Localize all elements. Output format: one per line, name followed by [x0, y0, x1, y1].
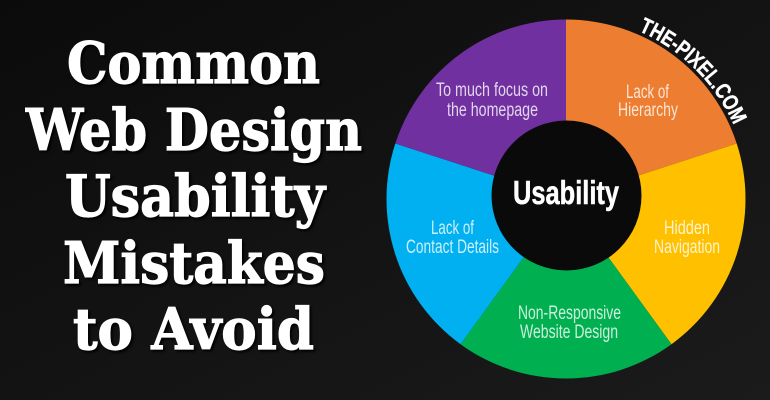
segment: To much focus on the homepage: the homepage: [447, 100, 538, 121]
title: Mistakes: [63, 230, 325, 297]
title: Web Design: [25, 97, 362, 164]
segment: Lack of Contact Details: Contact Details: [406, 237, 499, 258]
segment: Hidden Navigation: Hidden: [664, 218, 710, 239]
segment: To much focus on the homepage: To much focus on: [436, 80, 548, 101]
segment: Lack of Hierarchy: Lack of: [626, 82, 670, 103]
donut chart: usability mistakes: [387, 20, 745, 378]
segment: Lack of Contact Details: [387, 144, 566, 344]
segment: To much focus on the homepage: [395, 20, 566, 199]
center hub: Usability: [492, 120, 642, 270]
title: Common: [67, 30, 320, 97]
segment: Hidden Navigation: Navigation: [654, 237, 720, 258]
segment: Non-Responsive Website Design: Non-Responsive: [518, 303, 621, 324]
title: Usability: [65, 163, 327, 230]
title: [25, 30, 362, 363]
title: to Avoid: [73, 296, 314, 363]
watermark: THE-PIXEL.COM: THE-PIXEL.COM: [642, 17, 748, 124]
segment: Non-Responsive Website Design: [460, 199, 672, 378]
segment: Lack of Hierarchy: [566, 20, 737, 199]
segment: Non-Responsive Website Design: Website Design: [520, 322, 618, 343]
center hub: Usability: Usability: [513, 174, 619, 211]
segment: Lack of Hierarchy: Hierarchy: [618, 100, 678, 121]
segment: Hidden Navigation: [566, 144, 745, 344]
segment: Lack of Contact Details: Lack of: [431, 218, 475, 239]
